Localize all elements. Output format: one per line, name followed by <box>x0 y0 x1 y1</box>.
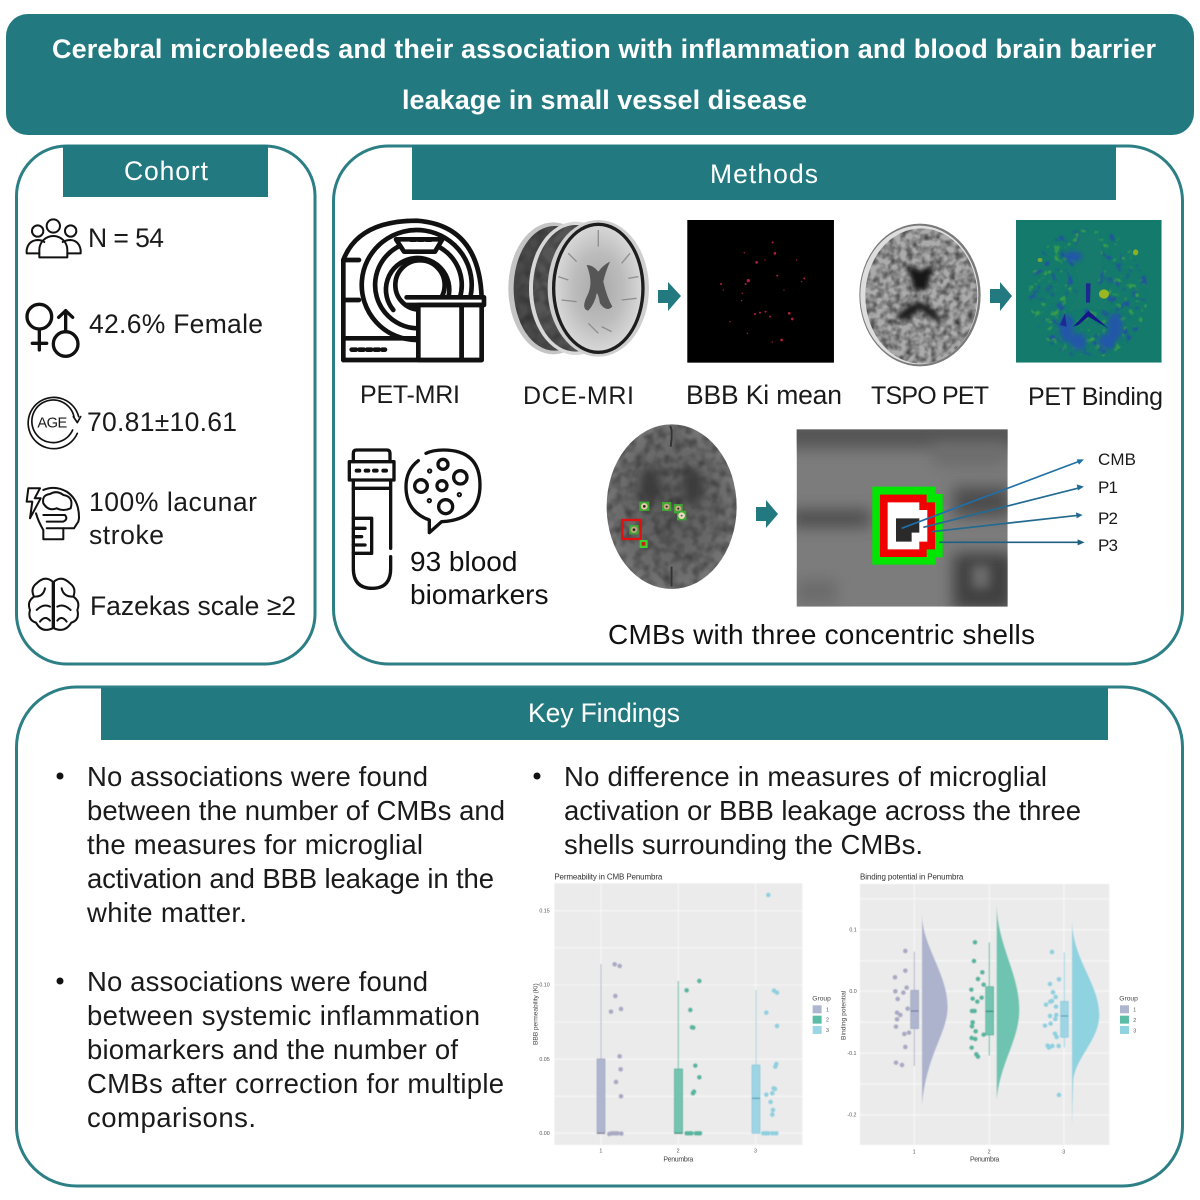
label: TSPO PET: TSPO PET <box>871 382 989 410</box>
icon: blood tube <box>349 450 394 588</box>
text: lacunar stroke: stroke <box>89 520 164 550</box>
icon: PET-MRI scanner <box>343 221 484 360</box>
label: BBB Ki mean: BBB Ki mean <box>686 380 842 410</box>
text: fazekas: Fazekas scale ≥2 <box>90 591 296 621</box>
label: DCE-MRI: DCE-MRI <box>523 382 634 410</box>
heading: cohort: Cohort <box>124 156 209 186</box>
panel: methods <box>334 145 1182 664</box>
finding: systemic inflammation: biomarkers and the number of <box>87 1034 458 1065</box>
image: PET binding map <box>1016 220 1162 363</box>
panel: cohort <box>16 145 315 664</box>
chart: binding potential in penumbra: 0.0 <box>849 989 857 995</box>
chart: permeability in CMB penumbra: Permeability in CMB Penumbra <box>554 872 663 881</box>
arrow: DCE to Ki <box>658 282 681 311</box>
finding: CMBs and white matter: the measures for microglial <box>87 829 423 860</box>
chart: permeability in CMB penumbra: 2 <box>677 1149 680 1155</box>
finding: systemic inflammation: CMBs after correction for multiple <box>87 1068 504 1099</box>
chart: binding potential in penumbra: 0.1 <box>849 927 857 933</box>
finding: systemic inflammation: between systemic inflammation <box>87 1000 480 1031</box>
icon: head with lightning <box>27 488 79 539</box>
icon: people <box>27 219 81 257</box>
chart: permeability in CMB penumbra: 1 <box>826 1007 829 1013</box>
chart: binding potential in penumbra: 2 <box>1133 1018 1136 1024</box>
arrow: brain to shells <box>756 500 778 528</box>
finding: CMBs and white matter: No associations were found <box>87 761 428 792</box>
chart: binding potential in penumbra: Binding potential <box>840 990 847 1040</box>
text: sample size: N = 54 <box>88 223 164 253</box>
chart: permeability in CMB penumbra: 2 <box>826 1018 829 1024</box>
caption: concentric shells: CMBs with three concentric shells <box>608 619 1035 650</box>
labels: shells: P1 <box>1098 478 1118 497</box>
chart: permeability in CMB penumbra <box>533 872 831 1164</box>
finding: three shells: activation or BBB leakage across the three <box>564 795 1081 826</box>
chart: binding potential in penumbra: 3 <box>1062 1149 1065 1155</box>
icon: brain <box>29 579 78 630</box>
title banner: leakage in small vessel disease <box>402 85 807 115</box>
label: blood biomarkers <box>410 546 548 610</box>
chart: binding potential in penumbra: 3 <box>1133 1028 1136 1034</box>
image: TSPO PET <box>859 224 981 366</box>
arrows: shell callouts <box>902 459 1085 545</box>
chart: permeability in CMB penumbra: Penumbra <box>663 1157 693 1164</box>
chart: permeability in CMB penumbra: 1 <box>599 1149 602 1155</box>
finding: systemic inflammation <box>56 966 504 1133</box>
chart: binding potential in penumbra: -0.1 <box>847 1051 857 1057</box>
arrow: TSPO to binding <box>990 282 1012 311</box>
chart: permeability in CMB penumbra: 0.05 <box>539 1057 550 1063</box>
chart: binding potential in penumbra: 2 <box>988 1149 991 1155</box>
title banner <box>6 14 1194 135</box>
finding: CMBs and white matter <box>56 761 505 928</box>
image: brain with microbleeds <box>607 424 737 589</box>
chart: binding potential in penumbra: -0.2 <box>847 1113 857 1119</box>
finding: CMBs and white matter: activation and BBB leakage in the <box>87 863 494 894</box>
labels: shells: P2 <box>1098 509 1118 528</box>
icon: gender <box>27 304 78 356</box>
image: DCE-MRI stack <box>508 220 649 357</box>
heading: key findings: Key Findings <box>528 698 680 728</box>
heading: methods: Methods <box>710 159 818 189</box>
chart: permeability in CMB penumbra: 3 <box>826 1028 829 1034</box>
chart: permeability in CMB penumbra: 0.15 <box>539 908 550 914</box>
chart: binding potential in penumbra <box>840 872 1138 1164</box>
chart: binding potential in penumbra: 1 <box>913 1149 916 1155</box>
label: PET Binding: PET Binding <box>1028 383 1163 411</box>
chart: permeability in CMB penumbra: 0.10 <box>539 983 550 989</box>
text: lacunar stroke: 100% lacunar <box>89 487 257 517</box>
icon: age <box>28 397 81 449</box>
heading: key findings <box>101 688 1108 740</box>
chart: binding potential in penumbra: Penumbra <box>970 1157 999 1164</box>
image: zoomed CMB with shells <box>796 429 1008 607</box>
chart: binding potential in penumbra: 1 <box>1133 1008 1136 1014</box>
chart: permeability in CMB penumbra: 3 <box>754 1149 757 1155</box>
label: PET-MRI: PET-MRI <box>360 381 460 409</box>
labels: shells: P3 <box>1098 536 1118 555</box>
text: female share: 42.6% Female <box>89 309 263 339</box>
label: blood biomarkers: biomarkers <box>410 579 548 610</box>
panel: key findings <box>16 687 1182 1186</box>
finding: three shells: No difference in measures of microglial <box>564 761 1047 792</box>
finding: CMBs and white matter: between the number of CMBs and <box>87 795 505 826</box>
heading: cohort <box>63 145 268 197</box>
labels: shells: CMB <box>1098 450 1136 469</box>
finding: systemic inflammation: No associations were found <box>87 966 428 997</box>
finding: three shells <box>534 761 1081 860</box>
icon: biomarker speech bubble <box>406 450 480 533</box>
title banner: Cerebral microbleeds and their association with inflammation and blood brain barrier <box>52 34 1156 64</box>
text: age: 70.81±10.61 <box>87 407 237 437</box>
chart: permeability in CMB penumbra: BBB permeability (Ki) <box>533 983 540 1045</box>
finding: CMBs and white matter: white matter. <box>86 897 247 928</box>
heading: methods <box>412 145 1116 200</box>
chart: permeability in CMB penumbra: Group <box>812 995 831 1002</box>
labels: shells <box>1098 450 1136 555</box>
label: blood biomarkers: 93 blood <box>410 546 517 577</box>
finding: systemic inflammation: comparisons. <box>87 1102 256 1133</box>
chart: permeability in CMB penumbra: 0.00 <box>539 1131 550 1137</box>
finding: three shells: shells surrounding the CMBs. <box>564 829 923 860</box>
text: lacunar stroke <box>89 487 257 550</box>
icon: age: AGE <box>37 415 68 431</box>
chart: binding potential in penumbra: Binding potential in Penumbra <box>860 872 964 881</box>
chart: binding potential in penumbra: Group <box>1119 996 1138 1003</box>
image: BBB Ki map <box>687 220 834 363</box>
